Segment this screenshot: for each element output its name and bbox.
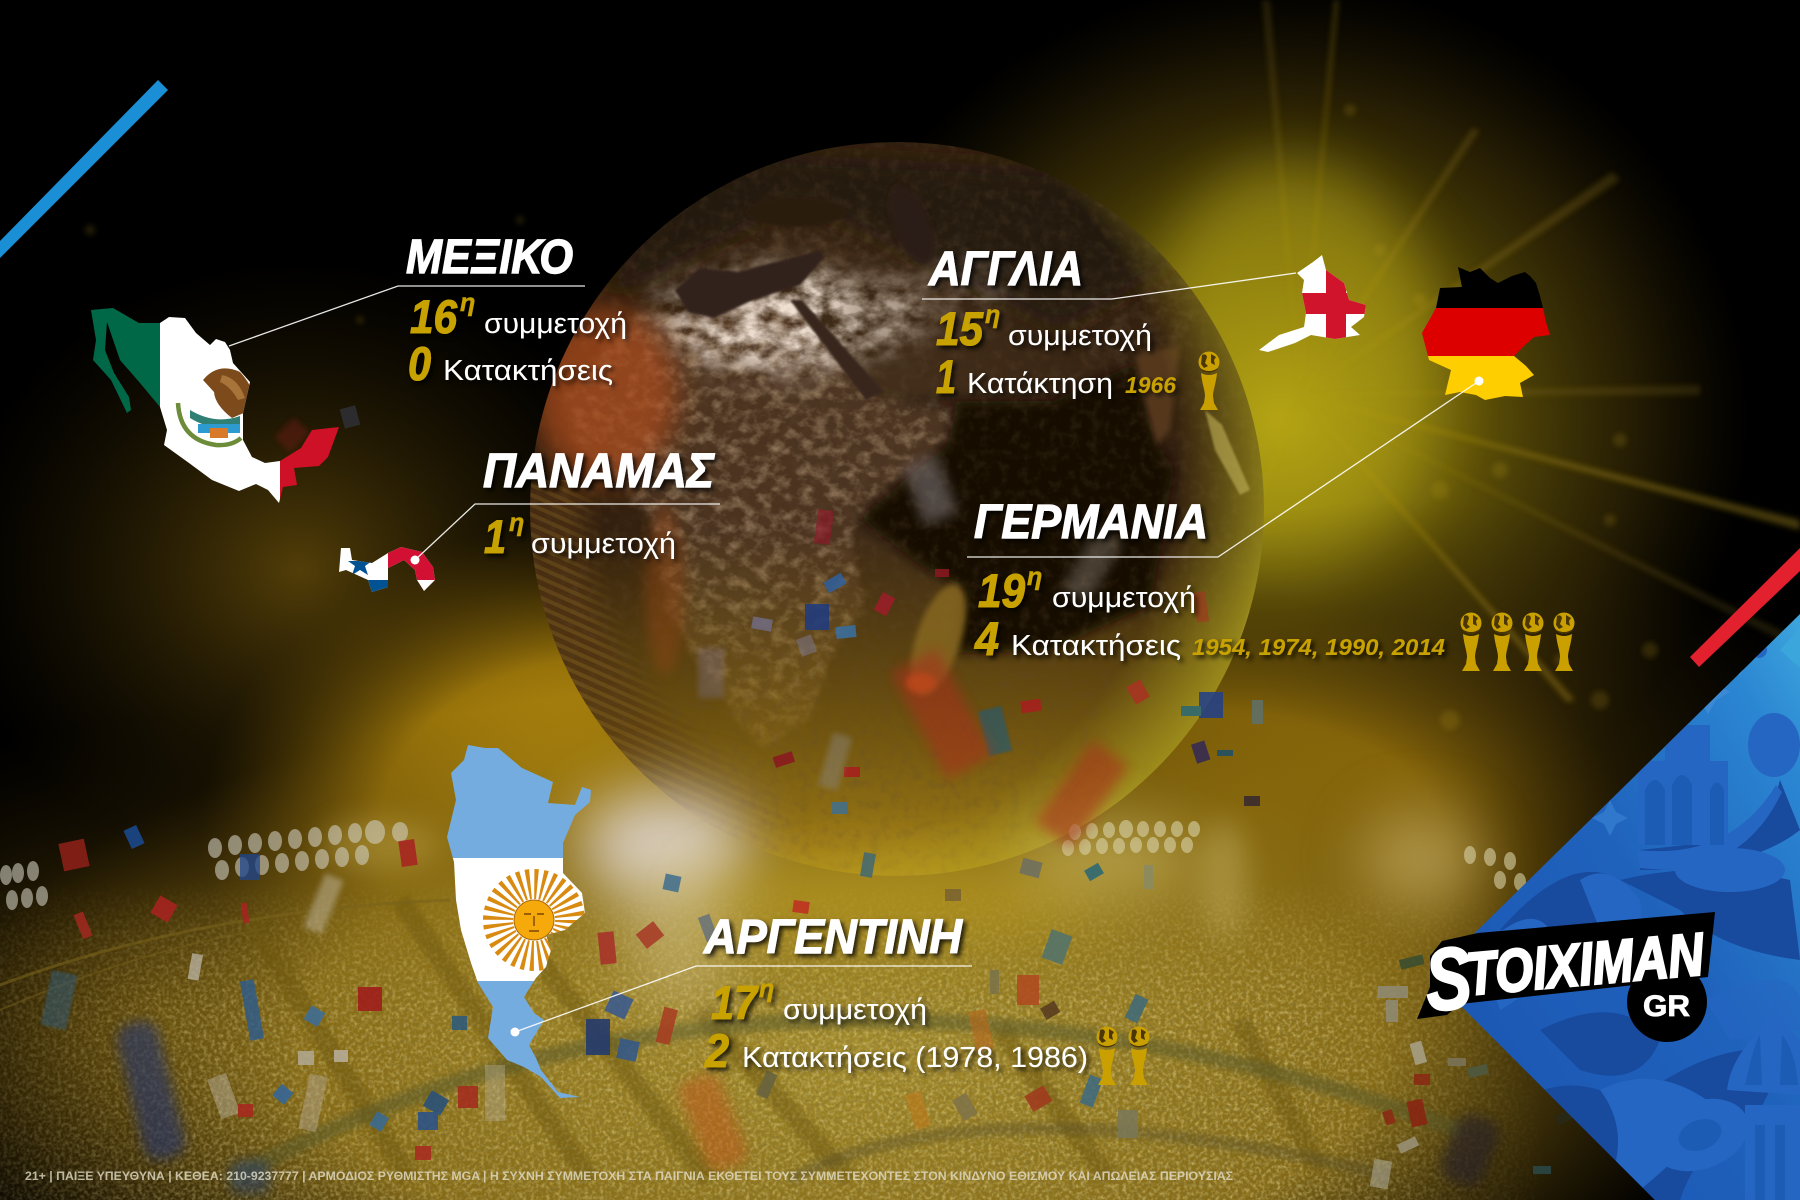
ornament: light shapes [1480,628,1800,1200]
icons: trophies [1460,612,1574,671]
mediterranean [675,250,824,318]
africa texture [570,200,1189,736]
map: Germany [1420,260,1555,404]
marker dot [1474,376,1484,386]
titles number: 2 [704,1024,729,1077]
logo backing [1417,912,1715,1019]
callout: Panama [410,445,720,564]
callout: Germany [967,376,1574,671]
ornament: dark swirls [1500,780,1800,1200]
leader line [415,504,720,560]
titles label: Κατακτήσεις (1978, 1986) [742,1042,1088,1074]
logo badge [1627,962,1707,1042]
participations number: 15 [936,302,984,355]
participations number: 1 [484,510,506,563]
map: Argentina [440,740,600,1101]
callout: Mexico [229,231,627,390]
callout: England [922,243,1296,410]
floodlights left [0,820,408,910]
title years: 1954, 1974, 1990, 2014 [1192,634,1445,660]
map: England [1255,250,1370,360]
marker dot [510,1028,520,1036]
titles number: 1 [936,350,956,403]
heading: ΑΓΓΛΙΑ [928,243,1083,296]
footer disclaimer: 21+ | ΠΑΙΞΕ ΥΠΕΥΘΥΝΑ | ΚΕΘΕΑ: 210-9237777 | ΑΡΜΟΔΙΟΣ ΡΥΘΜΙΣΤΗΣ MGA | Η ΣΥΧΝΗ ΣΥΜΜΕΤΟΧΗ ΣΤΑ ΠΑΙΓΝΙΑ ΕΚΘΕΤΕΙ ΤΟΥΣ ΣΥΜΜΕΤΕΧΟΝΤΕΣ ΣΤΟΝ ΚΙΝΔΥΝΟ ΕΘΙΣΜΟΥ ΚΑΙ ΑΠΩΛΕΙΑΣ ΠΕΡΙΟΥΣΙΑΣ [25,1169,1233,1183]
heading: ΠΑΝΑΜΑΣ [483,445,716,498]
decorative stripe: blue [0,80,168,258]
indian ocean [859,363,1174,653]
emblem water [198,424,240,433]
titles number: 4 [974,612,999,665]
ordinal mark: η [985,301,1000,329]
map: Panama [335,540,445,600]
leader line [922,273,1296,299]
titles label: Κατάκτηση [967,368,1113,400]
ordinal mark: η [759,975,774,1003]
title year: 1966 [1125,372,1176,398]
black sea [746,197,846,227]
stadium [0,790,1800,1200]
participations number: 19 [978,564,1025,617]
onion dome [1727,1000,1800,1095]
logo wordmark rest: TOIXIMAN [1463,920,1708,1008]
flag star [348,553,372,575]
sun rays [498,884,570,956]
map: Mexico [85,300,345,510]
panel: blue corner with ornament pattern [1420,600,1800,1200]
callout text [974,496,1445,665]
callout: Argentina [510,911,1150,1085]
leader line [229,286,585,346]
callout text [406,231,627,390]
right limb glow [924,183,1264,873]
ordinal mark: η [460,289,475,317]
emblem eagle [203,368,252,418]
titles label: Κατακτήσεις [443,355,613,387]
lower gold shading [546,557,1240,876]
globe [520,130,1280,890]
marker dot [410,556,420,564]
emblem cactus [190,410,240,427]
ordinal mark: η [509,509,524,537]
logo: Stoiximan GR [1417,912,1715,1042]
stadium roof [0,900,450,985]
participations label: συμμετοχή [531,528,676,560]
light rays [1192,0,1800,702]
west africa glow [533,307,677,483]
asia coast [1205,410,1250,495]
caspian [891,188,936,267]
sparkle particles [85,104,1658,730]
madagascar [910,582,969,684]
participations number: 17 [711,976,759,1029]
callout text [483,445,716,563]
logo wordmark: S [1421,927,1475,1030]
heading: ΜΕΞΙΚΟ [406,231,573,284]
light glows [580,790,750,900]
titles number: 0 [408,337,431,390]
stadium walkways [250,900,1320,1180]
stadium ring [230,1020,1460,1180]
lit land texture [640,247,1013,392]
heading: ΑΡΓΕΝΤΙΝΗ [703,911,963,964]
heading: ΓΕΡΜΑΝΙΑ [974,496,1208,549]
decorative stripe: red [1690,548,1800,667]
leader line [515,966,972,1032]
emblem wreath [178,403,241,445]
africa [615,307,950,728]
floodlights right [1062,820,1526,891]
titles label: Κατακτήσεις [1011,630,1181,662]
surface texture [601,144,1214,868]
participations number: 16 [410,290,458,343]
participations label: συμμετοχή [1052,582,1196,614]
icon: trophy [1198,352,1220,410]
leader line [967,381,1479,557]
logo GR: GR [1643,990,1690,1023]
callout text [928,243,1176,403]
india [1135,345,1180,445]
atlantic hatch [530,480,744,812]
icons: trophies [1096,1026,1150,1085]
callout text [703,911,1088,1077]
red sea [790,300,884,400]
confetti [40,405,1575,1194]
sun face [514,900,554,940]
ornament: arches and details [1645,775,1798,1200]
europe dark [600,150,1180,330]
participations label: συμμετοχή [484,308,627,340]
participations label: συμμετοχή [1008,320,1152,352]
crowd texture [0,894,1525,1200]
ordinal mark: η [1027,563,1042,591]
participations label: συμμετοχή [783,994,927,1026]
